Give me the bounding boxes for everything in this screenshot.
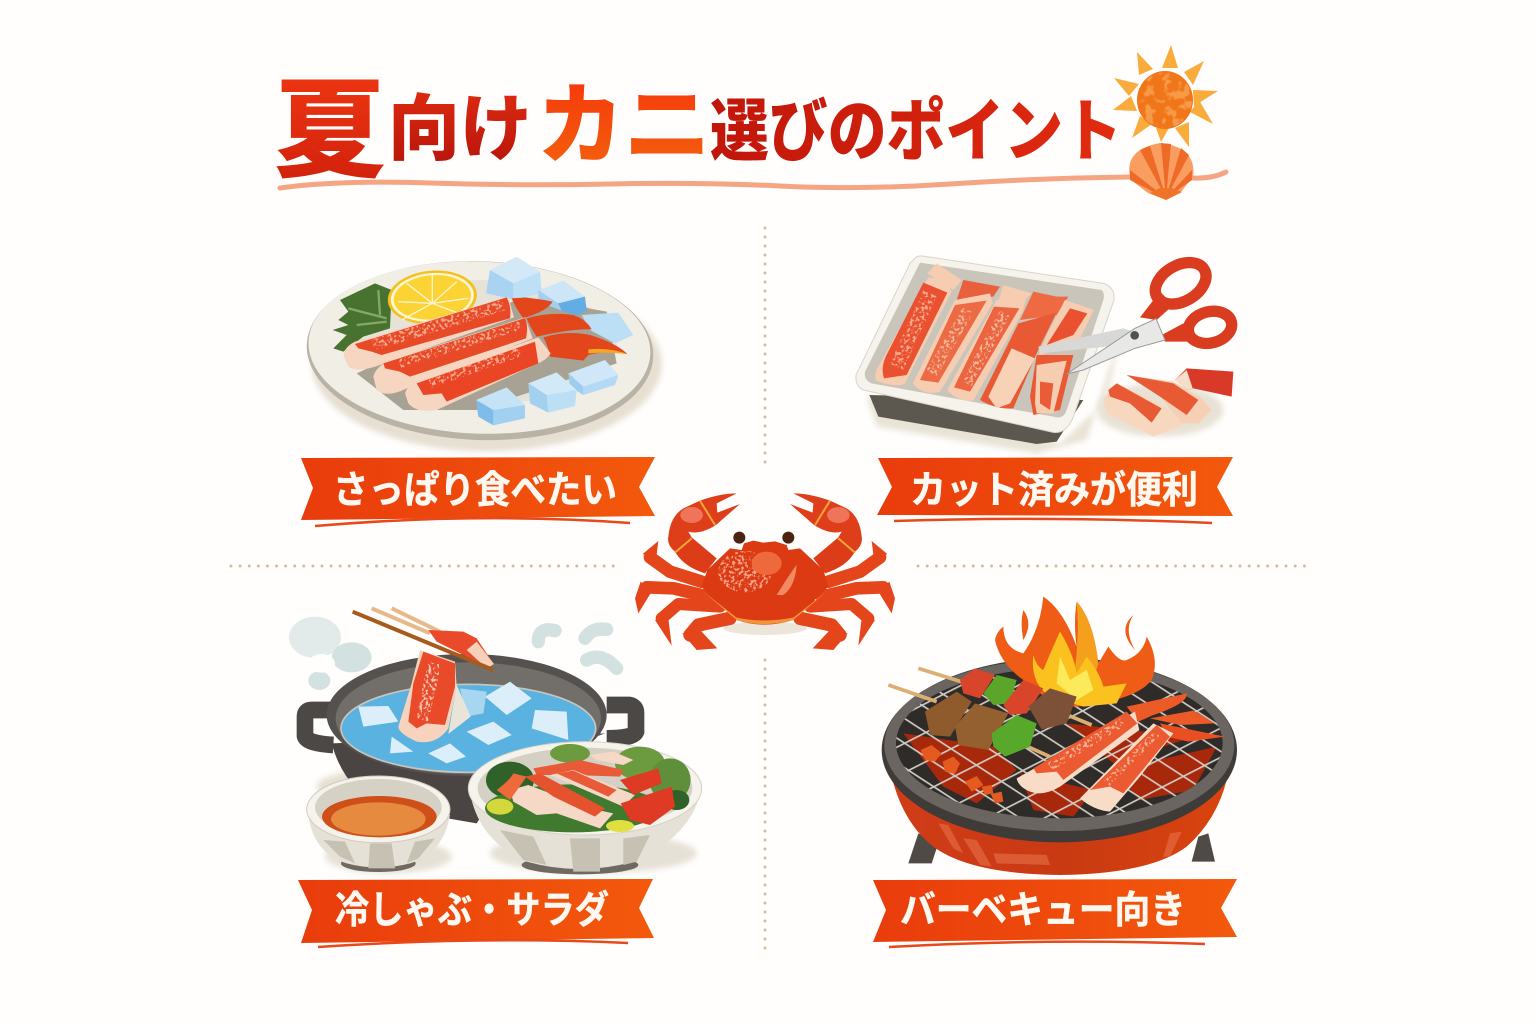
- salad greens: [485, 744, 691, 832]
- crab stick: [947, 285, 1032, 401]
- crab leg dipped: [398, 650, 471, 742]
- banner: バーベキュー向き: [873, 879, 1237, 947]
- icon: leaves: [333, 283, 392, 352]
- cut crab pieces in tray: [988, 348, 1073, 415]
- title: 向け: [388, 90, 532, 170]
- icon: steam clouds: [289, 617, 617, 690]
- panel: barbecue: [873, 597, 1240, 947]
- panel: cold shabu and salad: [289, 608, 702, 947]
- banner: さっぱり食べたい: さっぱり食べたい: [333, 470, 617, 512]
- skewers: [888, 668, 1092, 757]
- title: 夏: [274, 70, 386, 191]
- pot body: [332, 733, 605, 823]
- left legs and claw: [635, 493, 740, 650]
- grill rim: [882, 658, 1237, 842]
- right legs and claw: [790, 493, 895, 650]
- grilled crab legs: [1017, 693, 1225, 812]
- banner: カット済みが便利: [877, 457, 1233, 523]
- ice cube: [476, 387, 525, 425]
- icon: scissors: [1038, 254, 1235, 374]
- banner: バーベキュー向き: バーベキュー向き: [900, 890, 1186, 932]
- ice cube: [582, 313, 633, 343]
- divider: bottom vertical dotted: [764, 660, 766, 949]
- ice cube: [538, 281, 587, 315]
- icon: central crab: [635, 493, 895, 650]
- divider: right horizontal dotted: [918, 564, 1305, 568]
- illustration: tray, scissors and crab pieces: [856, 254, 1235, 453]
- panel: pre-cut crab tray: [856, 254, 1235, 523]
- grill legs: [908, 833, 1215, 863]
- crab shell body: [702, 541, 828, 625]
- crab stick: [980, 292, 1094, 409]
- icon: seashell: [1129, 143, 1193, 200]
- salad bowl: [468, 742, 702, 874]
- crab on salad: [497, 752, 635, 828]
- divider: left horizontal dotted: [231, 564, 614, 568]
- ice cube: [528, 372, 577, 413]
- title: 選びのポイント: [710, 94, 1122, 170]
- ice blocks: [358, 682, 568, 763]
- title wavy underline: [280, 172, 1226, 188]
- crab eyes: [733, 532, 794, 544]
- crab stick: [875, 263, 962, 385]
- crab stick: [913, 280, 1000, 393]
- ice cube: [568, 360, 618, 395]
- banner: 冷しゃぶ・サラダ: 冷しゃぶ・サラダ: [335, 890, 609, 932]
- pot handles: [305, 705, 636, 745]
- dipping sauce bowl: [307, 776, 452, 873]
- banner: 冷しゃぶ・サラダ: [298, 879, 654, 947]
- crab leg: [343, 297, 553, 370]
- illustration: plate with crab legs, lemon and ice: [304, 255, 662, 451]
- title: [274, 70, 1122, 191]
- title: カニ: [537, 76, 711, 175]
- ice cube: [486, 257, 542, 299]
- cut crab pieces: [1097, 368, 1233, 437]
- divider: top vertical dotted: [764, 228, 766, 465]
- grill basin: [892, 777, 1227, 875]
- banner: さっぱり食べたい: [301, 457, 655, 526]
- illustration: grill with skewers and crab: [880, 597, 1240, 875]
- grate: [896, 672, 1223, 818]
- crab claw: [405, 333, 627, 411]
- icon: lemon: [386, 267, 479, 328]
- coals: [921, 745, 1003, 803]
- water: [341, 684, 596, 772]
- illustration: ice water pot, sauce and salad: [289, 608, 702, 874]
- tomatoes: [620, 768, 675, 825]
- crab leg: [373, 314, 592, 394]
- banner: カット済みが便利: カット済みが便利: [910, 470, 1198, 512]
- panel: refreshing crab plate: [301, 255, 662, 526]
- flames: [995, 597, 1155, 707]
- chopsticks: [353, 608, 494, 670]
- icon: sun: [1113, 45, 1218, 147]
